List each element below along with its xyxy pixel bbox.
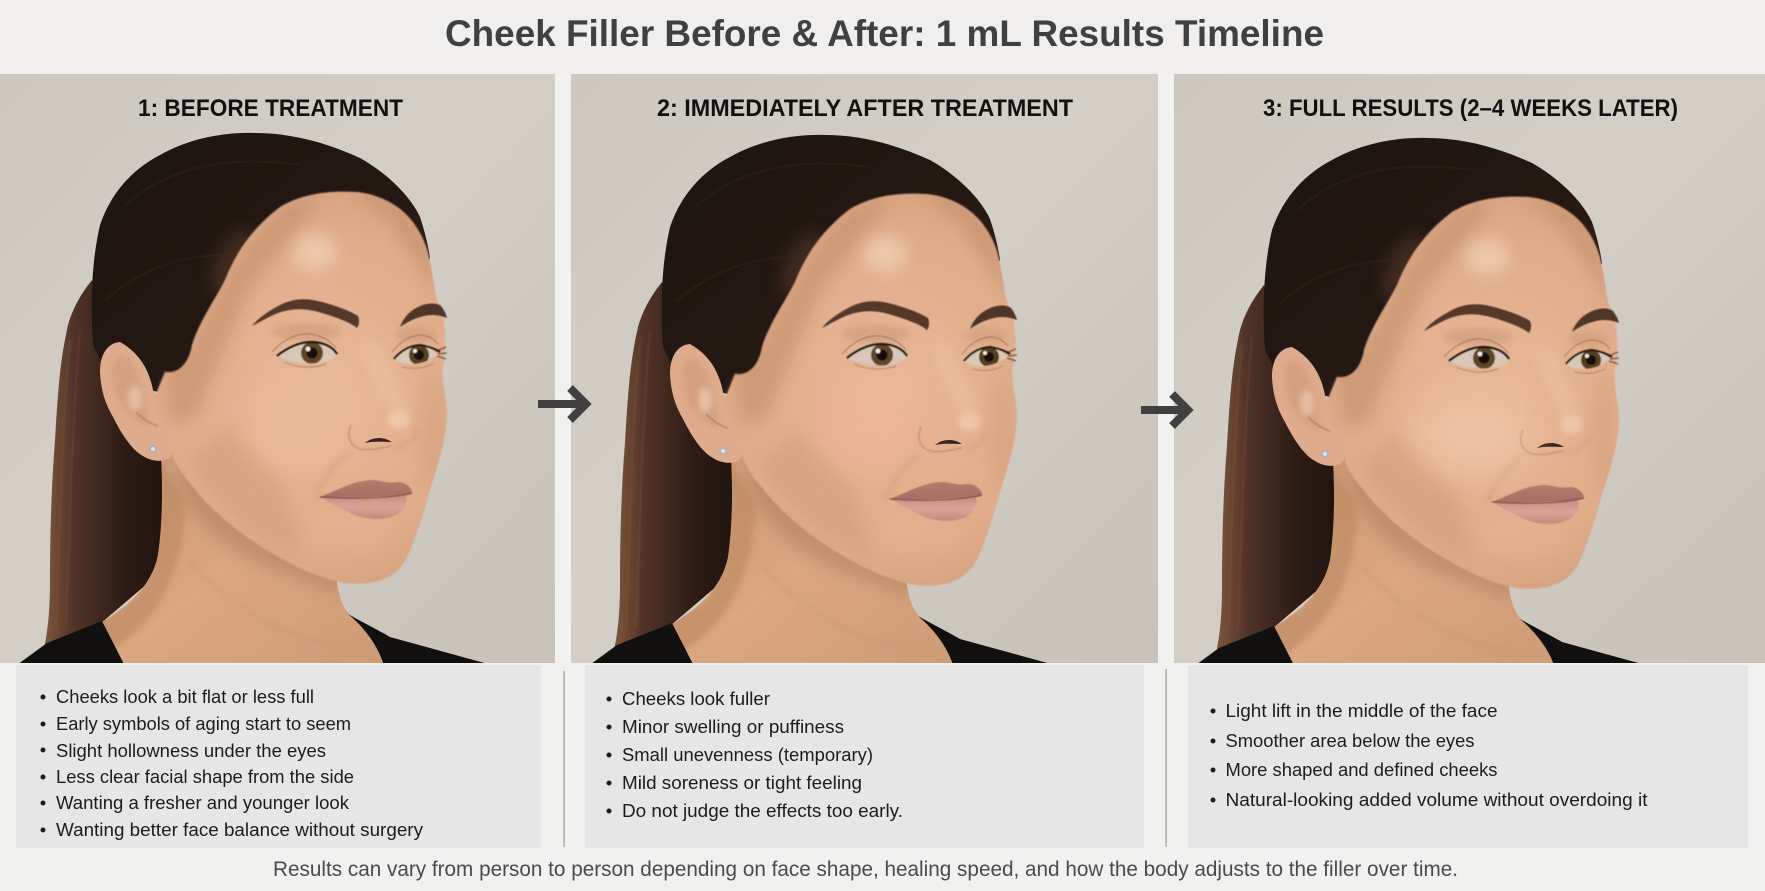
portrait: woman immediately after treatment: [580, 135, 1080, 672]
text block: before treatment points: Wanting a fresher and younger look: [56, 793, 350, 813]
text block: immediately after points: Do not judge the effects too early.: [622, 801, 903, 821]
text block: full results points: More shaped and defined cheeks: [1226, 760, 1498, 780]
panel: before treatment portrait: [0, 74, 555, 670]
text block: before treatment points: Slight hollowness under the eyes: [56, 741, 326, 761]
text block: before treatment points: Less clear facial shape from the side: [56, 767, 354, 787]
text block: full results points: Light lift in the middle of the face: [1226, 701, 1498, 721]
bottom band: [0, 663, 1765, 891]
text block: before treatment points: Wanting better face balance without surgery: [56, 820, 423, 840]
heading: full results: 3: FULL RESULTS (2–4 WEEKS LATER): [1263, 95, 1678, 122]
footer note: Results can vary from person to person depending on face shape, healing speed, and how the body adjusts to the filler over time.: [273, 858, 1458, 881]
portrait: woman before treatment: [10, 133, 510, 670]
portrait: woman with full results: [1182, 138, 1682, 675]
title: Cheek Filler Before & After: 1 mL Results Timeline: [445, 13, 1324, 54]
heading: before treatment: 1: BEFORE TREATMENT: [138, 95, 403, 122]
text block: before treatment points: Early symbols of aging start to seem: [56, 714, 351, 734]
text block: immediately after points: [585, 665, 1144, 848]
arrow: immediately after to full results: [1141, 394, 1188, 426]
panel: immediately after treatment portrait: [571, 74, 1158, 672]
text block: immediately after points: Small unevenness (temporary): [622, 745, 873, 765]
text block: full results points: Smoother area below the eyes: [1226, 731, 1474, 751]
text block: full results points: [1188, 665, 1748, 848]
arrow: before to immediately after: [538, 388, 586, 420]
panel: full results portrait: [1174, 74, 1765, 675]
text block: immediately after points: Minor swelling or puffiness: [622, 717, 844, 737]
title band: [0, 0, 1765, 74]
text block: full results points: Natural-looking added volume without overdoing it: [1226, 790, 1648, 810]
text block: immediately after points: Cheeks look fuller: [622, 689, 770, 709]
text block: before treatment points: [16, 665, 541, 848]
text block: before treatment points: Cheeks look a bit flat or less full: [56, 687, 314, 707]
heading: immediately after treatment: 2: IMMEDIATELY AFTER TREATMENT: [657, 95, 1073, 122]
text block: immediately after points: Mild soreness or tight feeling: [622, 773, 862, 793]
